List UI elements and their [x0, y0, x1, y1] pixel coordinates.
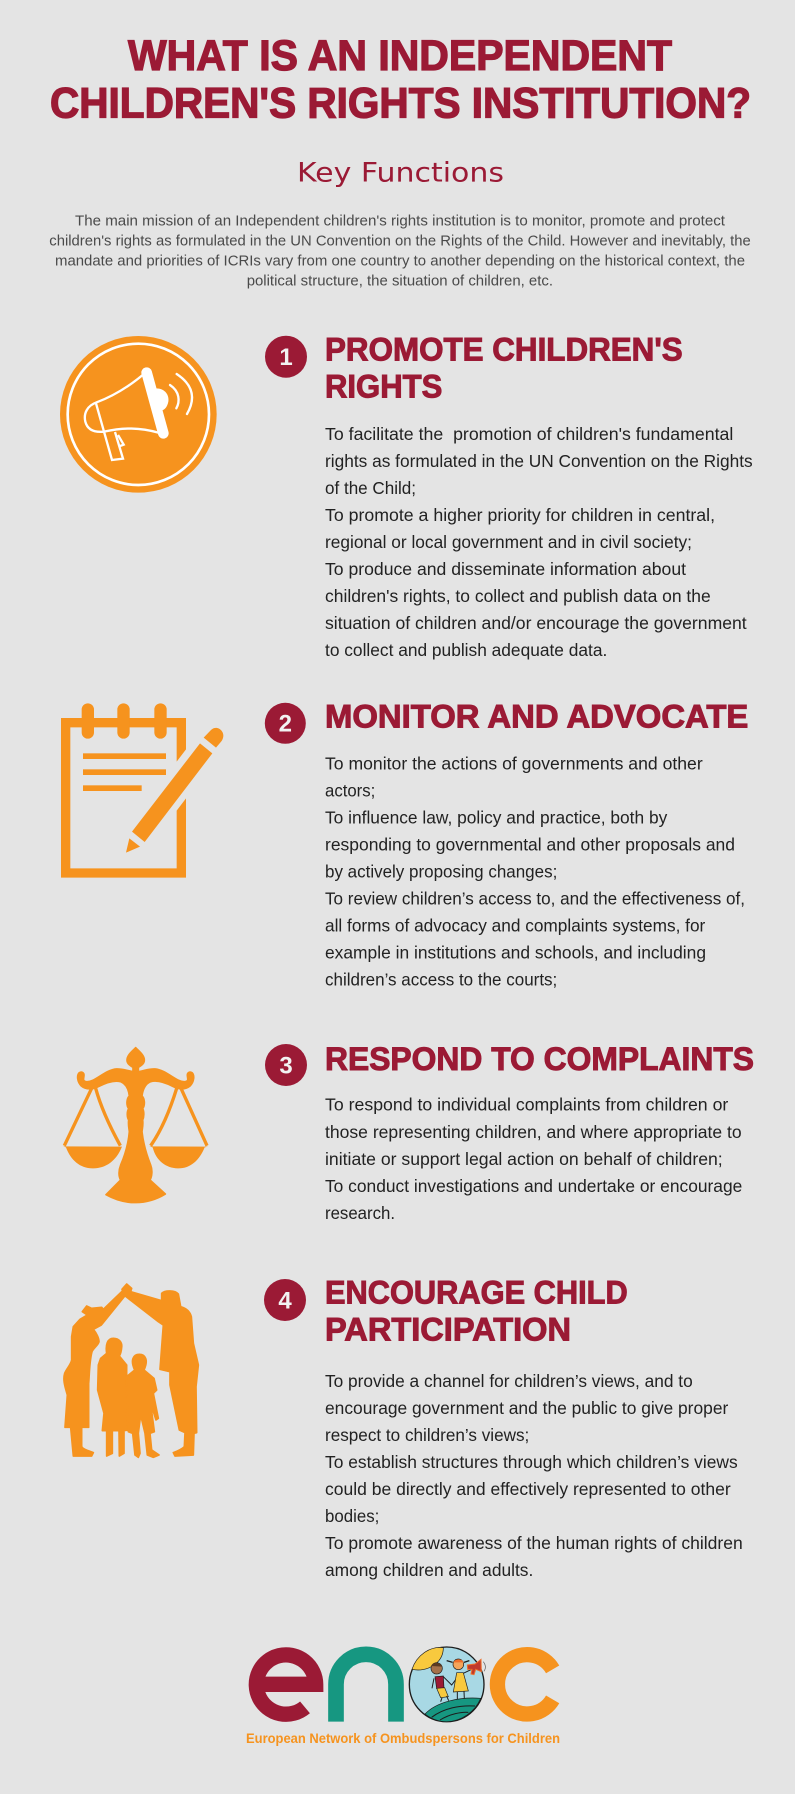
intro paragraph: children's rights as formulated in the UN Convention on the Rights of the Child. However and inevitably, the	[49, 233, 751, 250]
panel: monitor and advocate	[61, 699, 748, 989]
body text: promote: of the Child;	[325, 478, 416, 498]
body text: promote	[325, 424, 753, 660]
body text: promote: rights as formulated in the UN Convention on the Rights	[325, 451, 753, 471]
body text: promote: children's rights, to collect and publish data on the	[325, 586, 711, 606]
body text: monitor: actors;	[325, 780, 375, 800]
intro paragraph: mandate and priorities of ICRIs vary from one country to another depending on the historical context, the	[55, 253, 745, 270]
heading: encourage child participation: PARTICIPATION	[325, 1311, 571, 1347]
body text: respond	[325, 1095, 742, 1223]
title: WHAT IS AN INDEPENDENT	[128, 32, 672, 80]
panel: encourage child participation	[64, 1274, 743, 1580]
boy	[127, 1354, 159, 1457]
body text: respond: those representing children, and where appropriate to	[325, 1122, 742, 1142]
body text: promote: regional or local government and in civil society;	[325, 532, 692, 552]
body text: monitor: all forms of advocacy and complaints systems, for	[325, 915, 706, 935]
subtitle: key functions: Key Functions	[297, 158, 504, 189]
body text: respond: To respond to individual complaints from children or	[325, 1095, 729, 1115]
number badge 2	[265, 703, 306, 744]
logo tagline: European Network of Ombudspersons for Children	[246, 1731, 560, 1746]
body text: encourage: bodies;	[325, 1506, 379, 1526]
body text: encourage: encourage government and the public to give proper	[325, 1398, 729, 1418]
intro paragraph: The main mission of an Independent children's rights institution is to monitor, promote and protect	[75, 213, 726, 230]
body text: promote: to collect and publish adequate data.	[325, 640, 607, 660]
body text: encourage: respect to children’s views;	[325, 1425, 529, 1445]
intro paragraph: political structure, the situation of children, etc.	[247, 273, 553, 290]
adult on the right	[122, 1284, 198, 1456]
number badge 4: 4	[278, 1287, 292, 1314]
number badge 1: 1	[279, 344, 293, 371]
body text: respond: To conduct investigations and undertake or encourage	[325, 1176, 742, 1196]
adult on the left	[64, 1291, 125, 1456]
body text: promote: To facilitate the promotion of children's fundamental	[325, 424, 733, 444]
panel: promote children's rights	[60, 332, 753, 660]
heading: monitor and advocate: MONITOR AND ADVOCATE	[325, 699, 748, 735]
number badge 2: 2	[279, 710, 292, 738]
body text: monitor: To influence law, policy and practice, both by	[325, 807, 668, 827]
logo: ENOC	[246, 1647, 560, 1746]
heading: respond to complaints: RESPOND TO COMPLAINTS	[325, 1041, 754, 1077]
heading: encourage child participation: ENCOURAGE CHILD	[325, 1274, 628, 1310]
number badge 3: 3	[279, 1052, 293, 1079]
body text: monitor: To monitor the actions of governments and other	[325, 753, 703, 773]
body text: respond: initiate or support legal action on behalf of children;	[325, 1149, 723, 1169]
body text: encourage: among children and adults.	[325, 1560, 533, 1580]
intro paragraph	[49, 213, 751, 290]
icon: scales of justice	[63, 1048, 208, 1203]
body text: encourage: could be directly and effectively represented to other	[325, 1479, 731, 1499]
body text: encourage: To provide a channel for children’s views, and to	[325, 1371, 693, 1391]
title: CHILDREN'S RIGHTS INSTITUTION?	[50, 80, 751, 128]
heading: encourage child participation	[325, 1274, 628, 1347]
icon: megaphone in orange circle	[60, 336, 217, 493]
body text: encourage	[325, 1371, 743, 1580]
body text: monitor: To review children’s access to, and the effectiveness of,	[325, 888, 745, 908]
body text: promote: situation of children and/or encourage the government	[325, 613, 747, 633]
logo mark	[256, 1647, 553, 1722]
icon: notepad and pencil	[61, 703, 223, 878]
heading: promote children's rights	[325, 332, 683, 404]
title	[50, 32, 751, 128]
panel: respond to complaints	[63, 1041, 754, 1223]
number badge 1	[265, 336, 307, 378]
body text: monitor	[325, 753, 745, 989]
body text: monitor: by actively proposing changes;	[325, 861, 557, 881]
icon: family silhouette forming a roof	[64, 1284, 198, 1457]
body text: promote: To promote a higher priority for children in central,	[325, 505, 715, 525]
number badge 3	[265, 1044, 307, 1086]
body text: monitor: responding to governmental and other proposals and	[325, 834, 735, 854]
heading: promote children's rights: RIGHTS	[325, 368, 442, 404]
girl	[98, 1338, 128, 1456]
body text: encourage: To promote awareness of the human rights of children	[325, 1533, 743, 1553]
heading: promote children's rights: PROMOTE CHILDREN'S	[325, 332, 683, 368]
body text: monitor: children’s access to the courts;	[325, 969, 557, 989]
body text: monitor: example in institutions and schools, and including	[325, 942, 706, 962]
body text: respond: research.	[325, 1203, 395, 1223]
number badge 4	[264, 1279, 306, 1321]
body text: encourage: To establish structures through which children’s views	[325, 1452, 738, 1472]
body text: promote: To produce and disseminate information about	[325, 559, 686, 579]
